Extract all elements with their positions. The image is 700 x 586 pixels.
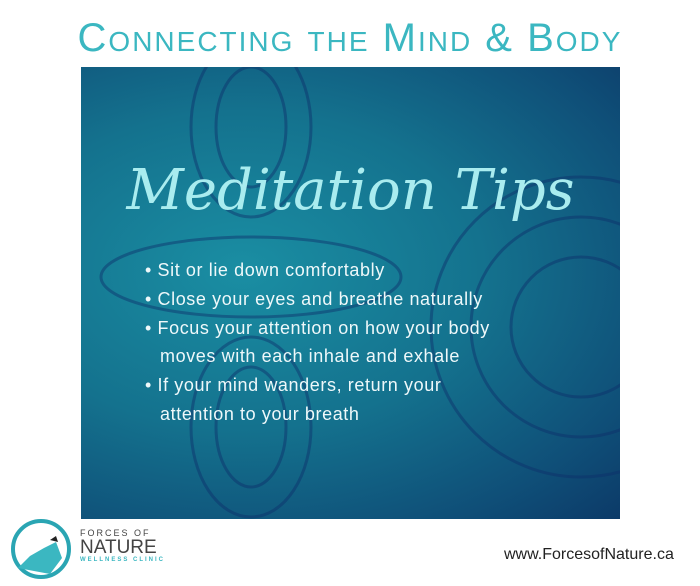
decorative mandala bbox=[100, 67, 620, 518]
website url: www.ForcesofNature.ca bbox=[504, 546, 674, 563]
title: Connecting the Mind & Body bbox=[78, 16, 622, 60]
logo text: FORCES OF bbox=[80, 528, 151, 538]
logo text bbox=[80, 528, 165, 563]
tips list: • Close your eyes and breathe naturally bbox=[145, 289, 483, 309]
logo bbox=[11, 519, 165, 579]
icon: logo circle bbox=[11, 519, 71, 579]
tips list: • Sit or lie down comfortably bbox=[145, 260, 385, 280]
logo text: WELLNESS CLINIC bbox=[80, 557, 165, 563]
tips list: • Focus your attention on how your body moves with each inhale and exhale bbox=[145, 318, 490, 366]
tips list bbox=[145, 260, 490, 424]
heading: Meditation Tips: Meditation Tips bbox=[126, 158, 574, 223]
tips list: • If your mind wanders, return your attention to your breath bbox=[145, 375, 441, 424]
panel: meditation tips bbox=[81, 67, 620, 519]
logo text: NATURE bbox=[80, 537, 157, 558]
